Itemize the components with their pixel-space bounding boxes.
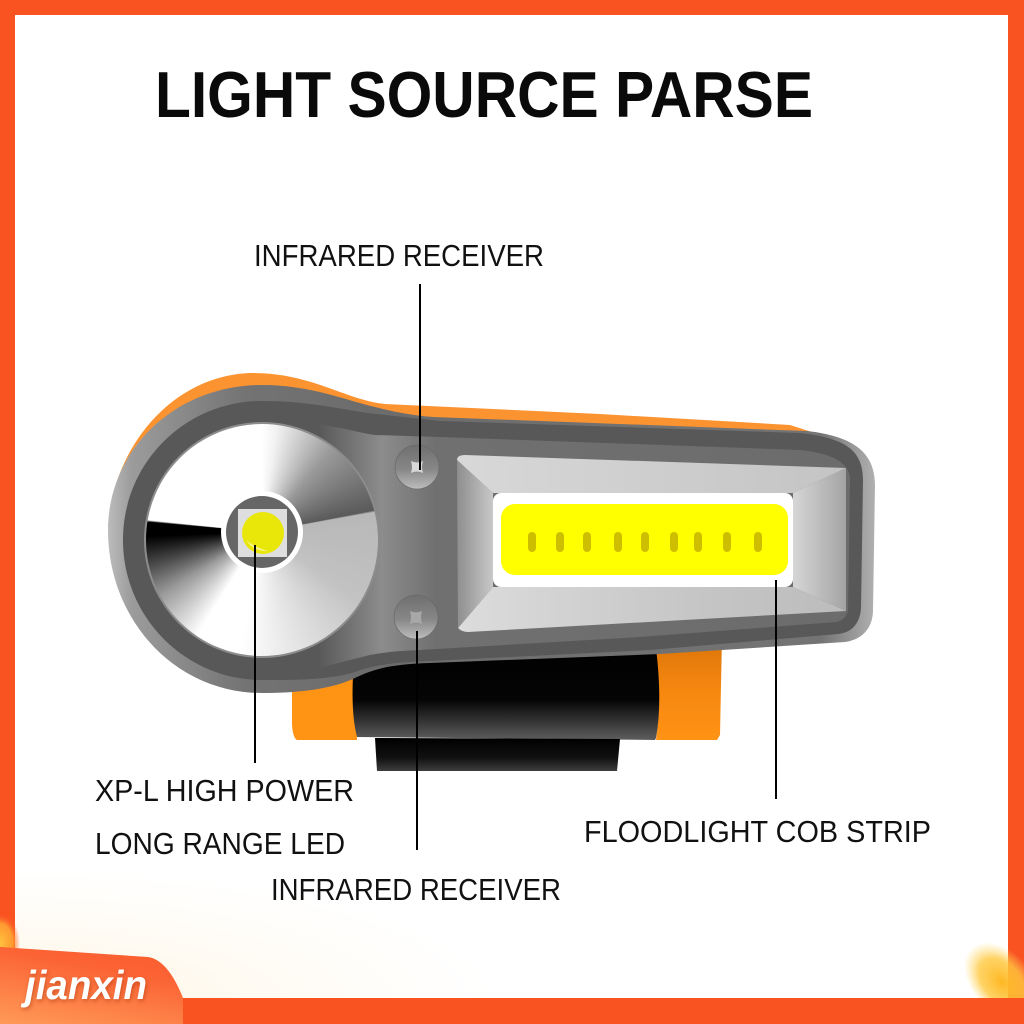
floodlight reflector panel bbox=[457, 455, 846, 632]
label: infrared receiver bottom: INFRARED RECEIVER bbox=[271, 872, 561, 907]
corner glow right bbox=[949, 928, 1024, 1024]
right orange clip bbox=[655, 636, 722, 740]
mid metal plate bbox=[300, 424, 850, 668]
left orange clip bbox=[292, 650, 357, 740]
black strap bbox=[353, 640, 659, 740]
title: LIGHT SOURCE PARSE bbox=[155, 58, 813, 131]
top screw bbox=[395, 445, 439, 489]
brand name: jianxin bbox=[20, 962, 147, 1008]
bottom screw bbox=[394, 595, 438, 639]
label: infrared receiver top: INFRARED RECEIVER bbox=[254, 238, 544, 273]
dome highlight bbox=[246, 540, 268, 551]
device: headlamp bbox=[108, 373, 875, 771]
reflector rim bbox=[144, 422, 380, 658]
COB LED dots bbox=[528, 532, 762, 552]
callout lines bbox=[255, 284, 776, 850]
COB white surround bbox=[493, 493, 793, 587]
metal body outer bbox=[108, 385, 875, 693]
LED chip bbox=[238, 509, 287, 557]
brand badge bbox=[0, 947, 1024, 1024]
LED yellow dome bbox=[242, 512, 284, 554]
orange rear shell bbox=[108, 373, 815, 560]
label: floodlight COB strip: FLOODLIGHT COB STRIP bbox=[584, 814, 931, 849]
lower black strap bbox=[375, 738, 620, 771]
label: XP-L high power long range LED: XP-L HIGH POWER bbox=[95, 773, 354, 808]
label: XP-L high power long range LED bbox=[95, 773, 354, 861]
dark band bbox=[123, 401, 863, 680]
LED white ring bbox=[221, 491, 303, 573]
reflector lens bbox=[146, 424, 378, 656]
COB yellow strip bbox=[501, 504, 788, 575]
corner glow left bbox=[0, 913, 20, 973]
label: XP-L high power long range LED: LONG RANGE LED bbox=[95, 826, 345, 861]
LED grey base bbox=[226, 496, 298, 568]
